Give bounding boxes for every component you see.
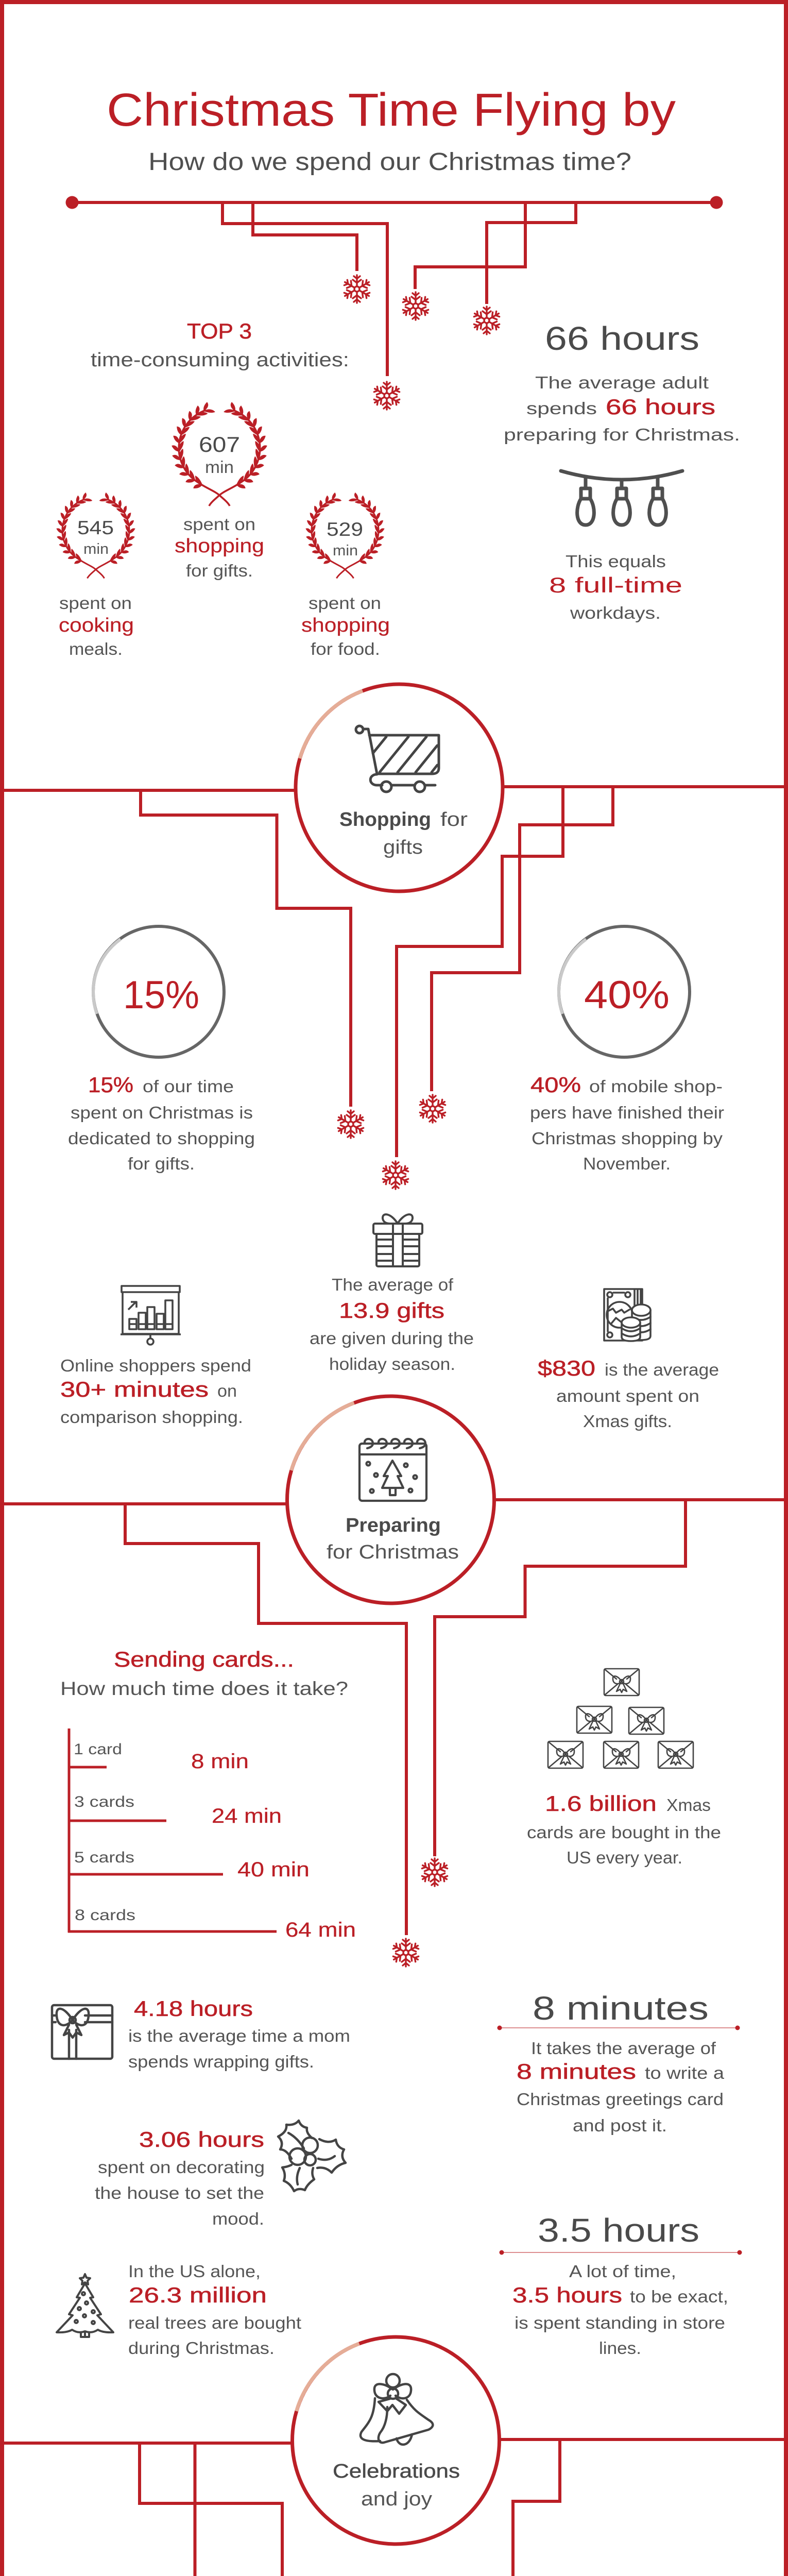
- subtitle: How do we spend our Christmas time?: [148, 148, 631, 176]
- text: 8 full-time workdays: workdays.: [570, 603, 661, 622]
- text: 15% of our time: [68, 1073, 255, 1173]
- bar: 1 card: 8 min: [191, 1750, 249, 1773]
- icon: christmas tree: [57, 2274, 113, 2337]
- text: 13.9 gifts: The average of: [332, 1275, 454, 1294]
- panel: 8 minutes: 8 minutes: [533, 1990, 709, 2027]
- wreath: 607 min shopping for gifts: min: [205, 457, 234, 477]
- wreath: 529 min shopping for food: shopping: [301, 615, 390, 636]
- wreath: 529 min shopping for food: 529: [327, 519, 363, 540]
- text: 1.6 billion: [527, 1791, 721, 1867]
- text: 1.6 billion: Xmas: [666, 1795, 711, 1815]
- wreath: 545 min cooking meals: cooking: [59, 615, 134, 636]
- text: $830: Xmas gifts.: [583, 1412, 672, 1431]
- text: 13.9 gifts: are given during the: [310, 1329, 474, 1348]
- panel: 8 minutes: Christmas greetings card: [517, 2090, 724, 2109]
- panel: top 3 heading: time-consuming activities:: [91, 349, 349, 371]
- panel: 3.5 hours: [500, 2212, 742, 2358]
- text: 26.3 million trees: [128, 2262, 301, 2358]
- text: 30+ minutes: comparison shopping.: [60, 1408, 243, 1427]
- text: 4.18 hours: spends wrapping gifts.: [128, 2052, 314, 2071]
- stat circle: 15%: [93, 926, 224, 1057]
- section divider lines: shopping: [4, 787, 784, 1189]
- icon: wrapped gift: [52, 2005, 112, 2059]
- wreath: 545 min cooking meals: [56, 492, 136, 658]
- text: 4.18 hours: [128, 1996, 350, 2071]
- text: $830: amount spent on: [556, 1386, 699, 1405]
- text: 13.9 gifts: holiday season.: [329, 1354, 455, 1374]
- section circle: shopping for gifts: gifts: [383, 837, 423, 858]
- text: 4.18 hours: is the average time a mom: [128, 2026, 350, 2045]
- bar: 1 card: [69, 1741, 249, 1773]
- text: 13.9 gifts: [310, 1275, 474, 1374]
- icon: gift box: [373, 1214, 422, 1266]
- section circle: shopping for gifts: Shopping: [339, 809, 431, 831]
- panel: 66 hours: The average adult: [535, 373, 709, 392]
- wreath: 529 min shopping for food: spent on: [309, 594, 381, 613]
- text: 15% of our time: 15%: [88, 1073, 133, 1097]
- panel: 66 hours: 66 hours: [545, 320, 699, 357]
- panel: 8 minutes: and post it.: [573, 2116, 667, 2135]
- section divider lines: preparing: [4, 1500, 784, 1967]
- panel: sending cards chart: Sending cards...: [114, 1647, 294, 1671]
- panel: sending cards chart: How much time does it take?: [60, 1678, 348, 1699]
- panel: 66 hours: spends: [526, 399, 597, 418]
- icon: shopping cart: [356, 726, 439, 792]
- wreath: 607 min shopping for gifts: spent on: [183, 515, 255, 534]
- wreath: 545 min cooking meals: min: [83, 541, 109, 557]
- text: 3.06 hours: mood.: [212, 2209, 264, 2228]
- text: 1.6 billion: cards are bought in the: [527, 1823, 721, 1842]
- bar: 3 cards: 24 min: [212, 1805, 282, 1827]
- icon: pile of envelopes: [548, 1669, 693, 1768]
- text: 26.3 million trees: during Christmas.: [128, 2338, 275, 2358]
- text: 15% of our time: for gifts.: [128, 1154, 195, 1173]
- text: $830: [538, 1356, 719, 1431]
- panel: 66 hours: [504, 320, 740, 444]
- bar: 3 cards: [69, 1793, 282, 1827]
- panel: 3.5 hours: to be exact,: [630, 2287, 728, 2306]
- text: 13.9 gifts: 13.9 gifts: [339, 1298, 444, 1323]
- top connector with hanging snowflakes: [66, 196, 723, 410]
- section circle: preparing for christmas: for Christmas: [327, 1541, 459, 1563]
- panel: 3.5 hours: A lot of time,: [569, 2262, 676, 2281]
- text: 30+ minutes: on: [217, 1381, 237, 1400]
- bar: 5 cards: 40 min: [237, 1858, 310, 1881]
- text: 3.06 hours: 3.06 hours: [139, 2127, 264, 2151]
- wreath: 607 min shopping for gifts: shopping: [175, 535, 264, 557]
- text: 40% of mobile shoppers: Christmas shopping by: [532, 1129, 723, 1148]
- panel: 3.5 hours: 3.5 hours: [512, 2283, 622, 2307]
- title: Christmas Time Flying by: [107, 84, 676, 136]
- bar: 3 cards: 3 cards: [74, 1793, 134, 1810]
- icon: presentation chart: [121, 1286, 181, 1345]
- stat circle: 40%: [559, 926, 690, 1057]
- section circle: shopping for gifts: for: [440, 809, 468, 831]
- panel: 66 hours: 66 hours: [606, 395, 715, 419]
- section circle: shopping for gifts: [296, 684, 503, 891]
- text: 3.06 hours: the house to set the: [95, 2183, 264, 2202]
- text: 1.6 billion: 1.6 billion: [545, 1791, 657, 1816]
- panel: 8 minutes: to write a: [645, 2063, 725, 2082]
- panel: 3.5 hours: is spent standing in store: [515, 2313, 725, 2332]
- text: 8 full-time workdays: [549, 552, 682, 622]
- bar: 8 cards: 8 cards: [75, 1907, 135, 1924]
- bar: 5 cards: 5 cards: [74, 1849, 134, 1866]
- stat circle: 40%: 40%: [584, 973, 670, 1017]
- text: 40% of mobile shoppers: November.: [583, 1154, 671, 1173]
- text: 40% of mobile shoppers: pers have finished their: [530, 1103, 724, 1122]
- text: 8 full-time workdays: 8 full-time: [549, 573, 682, 597]
- wreath: 529 min shopping for food: [301, 492, 390, 658]
- wreath: 607 min shopping for gifts: [171, 400, 268, 580]
- text: 15% of our time: dedicated to shopping: [68, 1129, 255, 1148]
- icon: string of lights: [561, 471, 682, 525]
- panel: 8 minutes: It takes the average of: [531, 2039, 716, 2058]
- wreath: 545 min cooking meals: meals.: [69, 639, 123, 658]
- wreath: 607 min shopping for gifts: for gifts.: [186, 561, 253, 580]
- wreath: 529 min shopping for food: for food.: [311, 639, 380, 658]
- panel: sending cards chart: [60, 1647, 356, 1941]
- panel: top 3 heading: [91, 319, 349, 371]
- bar: 8 cards: 64 min: [285, 1919, 356, 1941]
- bar: 5 cards: [69, 1849, 310, 1881]
- icon: bells: [361, 2374, 433, 2445]
- section circle: celebrations and joy: [293, 2337, 500, 2544]
- icon: holly: [278, 2121, 346, 2191]
- text: 26.3 million trees: In the US alone,: [128, 2262, 261, 2281]
- text: 3.06 hours: [95, 2127, 265, 2228]
- section circle: preparing for christmas: Preparing: [346, 1515, 441, 1536]
- text: 40% of mobile shoppers: [530, 1073, 724, 1173]
- section circle: preparing for christmas: [287, 1396, 494, 1603]
- section circle: celebrations and joy: Celebrations: [333, 2461, 460, 2482]
- text: $830: $830: [538, 1356, 595, 1380]
- text: 40% of mobile shoppers: 40%: [530, 1073, 581, 1097]
- wreath: 529 min shopping for food: min: [333, 543, 358, 559]
- text: $830: is the average: [605, 1360, 719, 1379]
- bar: 8 cards: [68, 1907, 356, 1941]
- section divider lines: celebrations: [4, 2439, 784, 2576]
- panel: 66 hours: preparing for Christmas.: [504, 425, 740, 444]
- panel: 3.5 hours: 3.5 hours: [538, 2212, 699, 2249]
- text: 3.06 hours: spent on decorating: [98, 2158, 265, 2177]
- panel: top 3 heading: TOP 3: [187, 319, 252, 343]
- text: 26.3 million trees: 26.3 million: [129, 2283, 267, 2307]
- panel: 3.5 hours: lines.: [599, 2338, 641, 2358]
- text: 15% of our time: of our time: [143, 1077, 234, 1096]
- text: 30+ minutes: [60, 1356, 251, 1427]
- panel: 8 minutes: 8 minutes: [517, 2059, 636, 2083]
- bar: 1 card: 1 card: [74, 1741, 122, 1758]
- icon: money and coins: [604, 1289, 650, 1341]
- text: 8 full-time workdays: This equals: [566, 552, 666, 571]
- section circle: celebrations and joy: and joy: [361, 2488, 432, 2510]
- icon: advent calendar: [359, 1439, 426, 1501]
- text: 30+ minutes: Online shoppers spend: [60, 1356, 251, 1375]
- text: 26.3 million trees: real trees are bought: [128, 2313, 301, 2332]
- text: 1.6 billion: US every year.: [567, 1848, 682, 1867]
- stat circle: 15%: 15%: [123, 973, 199, 1017]
- text: 30+ minutes: 30+ minutes: [60, 1377, 209, 1401]
- text: 40% of mobile shoppers: of mobile shop-: [589, 1077, 723, 1096]
- text: 4.18 hours: 4.18 hours: [134, 1996, 253, 2021]
- wreath: 607 min shopping for gifts: 607: [199, 432, 240, 456]
- wreath: 545 min cooking meals: spent on: [59, 594, 132, 613]
- text: 15% of our time: spent on Christmas is: [71, 1103, 253, 1122]
- wreath: 545 min cooking meals: 545: [77, 517, 114, 538]
- panel: 8 minutes: [498, 1990, 740, 2135]
